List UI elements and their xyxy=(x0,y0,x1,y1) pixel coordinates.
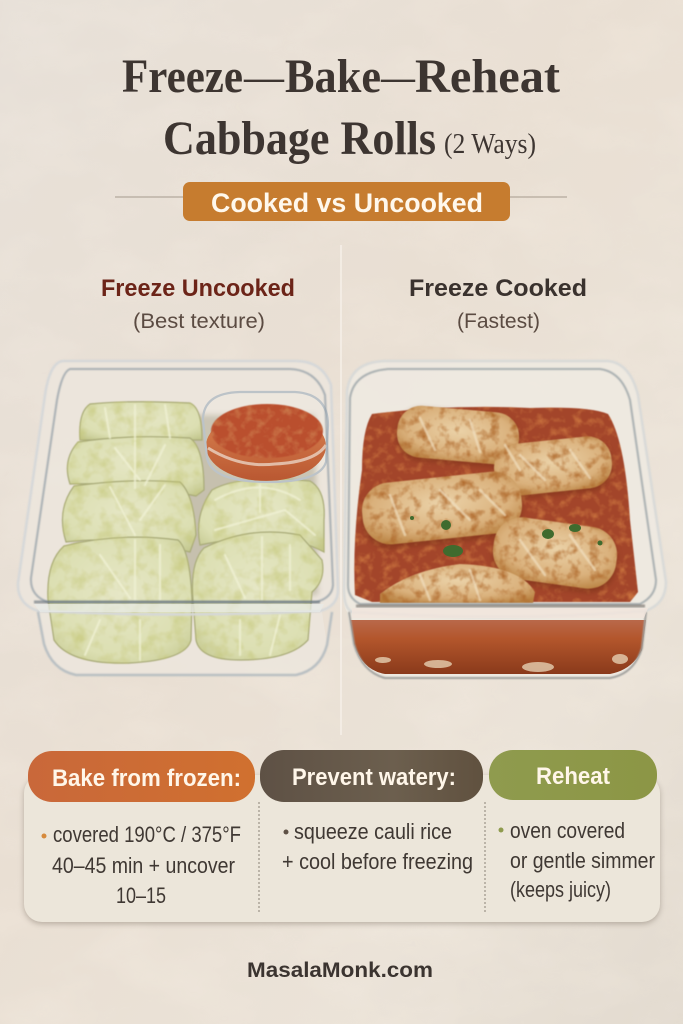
column: prevent watery xyxy=(260,750,483,874)
column: bake from frozen: 10–15 xyxy=(116,883,166,908)
title: Reheat xyxy=(415,50,560,103)
vertical divider xyxy=(340,245,342,735)
cooked roll shadows xyxy=(359,407,621,596)
glass body back xyxy=(343,360,667,678)
banner: cooked vs uncooked xyxy=(115,182,567,221)
leaf veins xyxy=(85,405,315,660)
banner: cooked vs uncooked: Cooked vs Uncooked xyxy=(211,188,483,218)
title: — xyxy=(380,50,416,103)
title: Cabbage Rolls xyxy=(163,112,436,165)
cabbage rolls xyxy=(48,402,324,663)
sauce cup xyxy=(203,392,328,482)
column: prevent watery: Prevent watery: xyxy=(292,764,456,791)
glass body back xyxy=(17,360,338,675)
footer: website: MasalaMonk.com xyxy=(247,959,433,982)
glass rim xyxy=(344,361,666,678)
heading: freeze cooked: Freeze Cooked xyxy=(409,275,587,302)
column: reheat: or gentle simmer xyxy=(510,848,655,873)
front sauce pale bits xyxy=(375,654,628,672)
heading: freeze cooked xyxy=(409,275,587,333)
tray shadow xyxy=(65,415,318,595)
column: prevent watery: + cool before freezing xyxy=(282,849,473,874)
title: (2 Ways) xyxy=(444,129,536,160)
sauce bed xyxy=(354,407,638,602)
panel: tips card xyxy=(24,750,660,922)
photo: cooked rolls in glass container xyxy=(343,360,667,678)
roll highlights xyxy=(390,418,595,600)
column: prevent watery: squeeze cauli rice xyxy=(294,819,452,844)
title xyxy=(122,50,560,165)
herbs xyxy=(410,516,602,557)
column: bake from frozen: Bake from frozen: xyxy=(52,765,241,792)
title: — xyxy=(243,50,285,103)
photo: uncooked rolls in glass container xyxy=(17,360,338,675)
column: bake from frozen: 40–45 min + uncover xyxy=(52,853,235,878)
column: bake from frozen xyxy=(28,751,255,908)
heading: freeze uncooked xyxy=(101,275,295,333)
column: reheat xyxy=(489,750,657,902)
front sauce through glass xyxy=(350,620,646,674)
glass rim xyxy=(18,361,338,675)
cooked rolls xyxy=(359,404,621,603)
column: reheat: (keeps juicy) xyxy=(510,877,611,902)
heading: freeze cooked: (Fastest) xyxy=(457,310,540,333)
column: bake from frozen: covered 190°C / 375°F xyxy=(53,822,241,847)
heading: freeze uncooked: Freeze Uncooked xyxy=(101,275,295,302)
column: reheat: oven covered xyxy=(510,818,625,843)
column: reheat: Reheat xyxy=(536,763,610,790)
title: Bake xyxy=(285,50,381,103)
heading: freeze uncooked: (Best texture) xyxy=(133,310,265,333)
title: Freeze xyxy=(122,50,243,103)
